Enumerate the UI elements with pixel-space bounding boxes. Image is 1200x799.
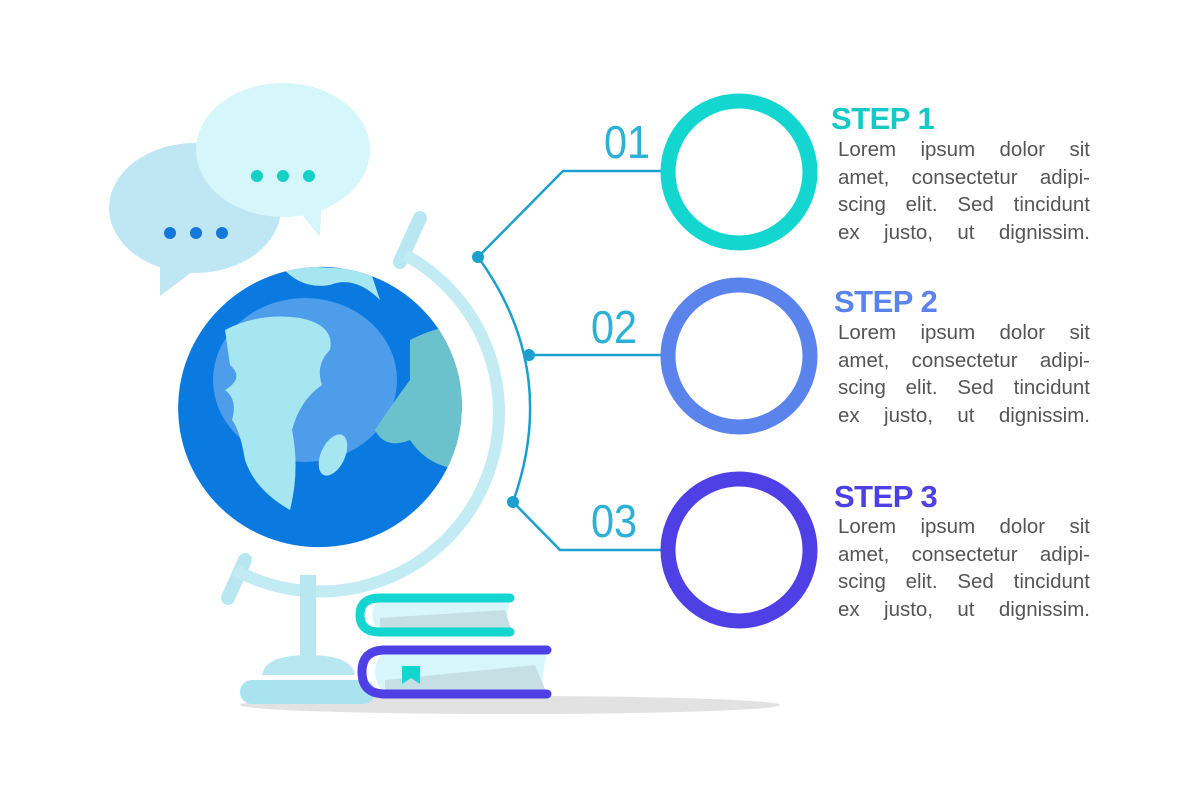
globe stand	[228, 218, 499, 704]
step 1 text: ut	[957, 221, 974, 244]
step 2 text: elit.	[906, 376, 938, 399]
step 2 text: scing	[838, 376, 886, 399]
step 2 text: ut	[957, 404, 974, 427]
step 3 text: ex	[838, 598, 860, 621]
book: top teal	[360, 598, 512, 632]
step 2 text: Sed	[957, 376, 994, 399]
globe	[178, 266, 462, 548]
step 1 text: sit	[1069, 138, 1090, 161]
step 3 text	[838, 515, 1090, 621]
step 1 text: Sed	[957, 193, 994, 216]
step 2 text: tincidunt	[1014, 376, 1090, 399]
step 1 text: Lorem	[838, 138, 896, 161]
speech bubbles	[109, 83, 370, 296]
step 3 text: tincidunt	[1014, 570, 1090, 593]
step 3 text: dolor	[1000, 515, 1045, 538]
step 3 text: consectetur	[912, 543, 1018, 566]
step 3 text: amet,	[838, 543, 889, 566]
step 3 text: justo,	[884, 598, 933, 621]
step 1 text: tincidunt	[1014, 193, 1090, 216]
number 03: 03	[591, 495, 637, 547]
step 1 text: amet,	[838, 166, 889, 189]
step 2 text: justo,	[884, 404, 933, 427]
step 2 text: amet,	[838, 349, 889, 372]
step circles	[668, 101, 810, 621]
step 2 text: ex	[838, 404, 860, 427]
number 02: 02	[591, 301, 637, 353]
number 01: 01	[604, 116, 650, 168]
step 1 text: dolor	[1000, 138, 1045, 161]
step 1 text: adipi-	[1040, 166, 1090, 189]
step 3 text: Lorem	[838, 515, 896, 538]
step 1 text: justo,	[884, 221, 933, 244]
book: bottom purple	[362, 650, 547, 694]
shadow	[240, 696, 780, 714]
step 3 text: ipsum	[920, 515, 975, 538]
step 3 text: adipi-	[1040, 543, 1090, 566]
step 2 text: ipsum	[920, 321, 975, 344]
books	[360, 598, 547, 694]
step 1 text: ex	[838, 221, 860, 244]
bubble: back	[109, 143, 281, 296]
step 2 text: consectetur	[912, 349, 1018, 372]
step 3 text: sit	[1069, 515, 1090, 538]
step 1 text	[838, 138, 1090, 244]
step 1 text: dignissim.	[999, 221, 1090, 244]
step 2 heading: STEP 2	[834, 284, 937, 319]
connectors	[478, 171, 662, 550]
step 2 text: dignissim.	[999, 404, 1090, 427]
step 3 text: Sed	[957, 570, 994, 593]
step 2 text: Lorem	[838, 321, 896, 344]
bubble: front	[196, 83, 370, 237]
step 1 text: scing	[838, 193, 886, 216]
step 2 text: dolor	[1000, 321, 1045, 344]
step 3 heading: STEP 3	[834, 479, 937, 514]
step 1 text: consectetur	[912, 166, 1018, 189]
step 2 text: sit	[1069, 321, 1090, 344]
step 1 heading: STEP 1	[831, 101, 934, 136]
step 3 text: dignissim.	[999, 598, 1090, 621]
step 1 text: ipsum	[920, 138, 975, 161]
step 3 text: elit.	[906, 570, 938, 593]
step 1 text: elit.	[906, 193, 938, 216]
step 2 text: adipi-	[1040, 349, 1090, 372]
step 2 text	[838, 321, 1090, 427]
step 3 text: scing	[838, 570, 886, 593]
step 3 text: ut	[957, 598, 974, 621]
